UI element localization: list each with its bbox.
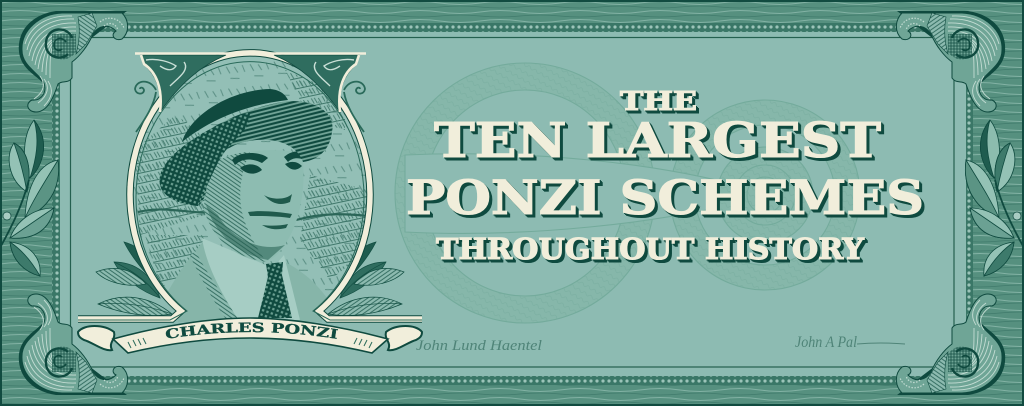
icon: left laurel branch [1, 120, 59, 276]
ribbon hatch marks [128, 338, 372, 348]
icon: portrait laurel left [96, 242, 172, 316]
corner ornament: top right [896, 11, 1005, 112]
face [204, 150, 304, 262]
title line: ponzi schemes: PONZI SCHEMES [406, 171, 924, 226]
eyes and brows [232, 151, 308, 174]
ribbon right curl [386, 326, 422, 350]
guilloche watermark rosette [395, 63, 860, 323]
small scroll left [135, 82, 156, 132]
signature right [795, 334, 905, 351]
hat band [182, 89, 288, 142]
ribbon caption: CHARLES PONZI [166, 322, 338, 339]
signature right: John A Pal [795, 334, 857, 351]
hat brim [160, 101, 332, 206]
corner ornament: top left [19, 11, 128, 112]
nose and mouth [248, 194, 292, 229]
ribbon body [113, 318, 388, 353]
title line: ten largest: TEN LARGEST [434, 113, 881, 169]
title [406, 87, 924, 266]
corner ornament: bottom left [19, 294, 128, 395]
icon: portrait laurel right [328, 242, 404, 316]
corner ornament: bottom right [896, 294, 1005, 395]
title line: throughout history: THROUGHOUT HISTORY [436, 232, 864, 266]
jacket [168, 243, 326, 322]
portrait of Charles Ponzi [134, 62, 366, 322]
hat shadow [160, 112, 250, 206]
oval frame [78, 53, 422, 320]
darker script background patches [135, 70, 368, 285]
ribbon left curl [78, 326, 114, 350]
signature left: John Lund Haentel [416, 338, 542, 354]
jaw shadow [206, 205, 285, 260]
name ribbon [77, 317, 423, 354]
top ornamental frame with spandrels [135, 54, 366, 132]
title line: the: THE [620, 87, 697, 117]
tie [258, 262, 292, 318]
icon: right laurel branch [965, 120, 1023, 276]
small scroll right [344, 82, 365, 132]
collar and shirt [202, 238, 300, 322]
